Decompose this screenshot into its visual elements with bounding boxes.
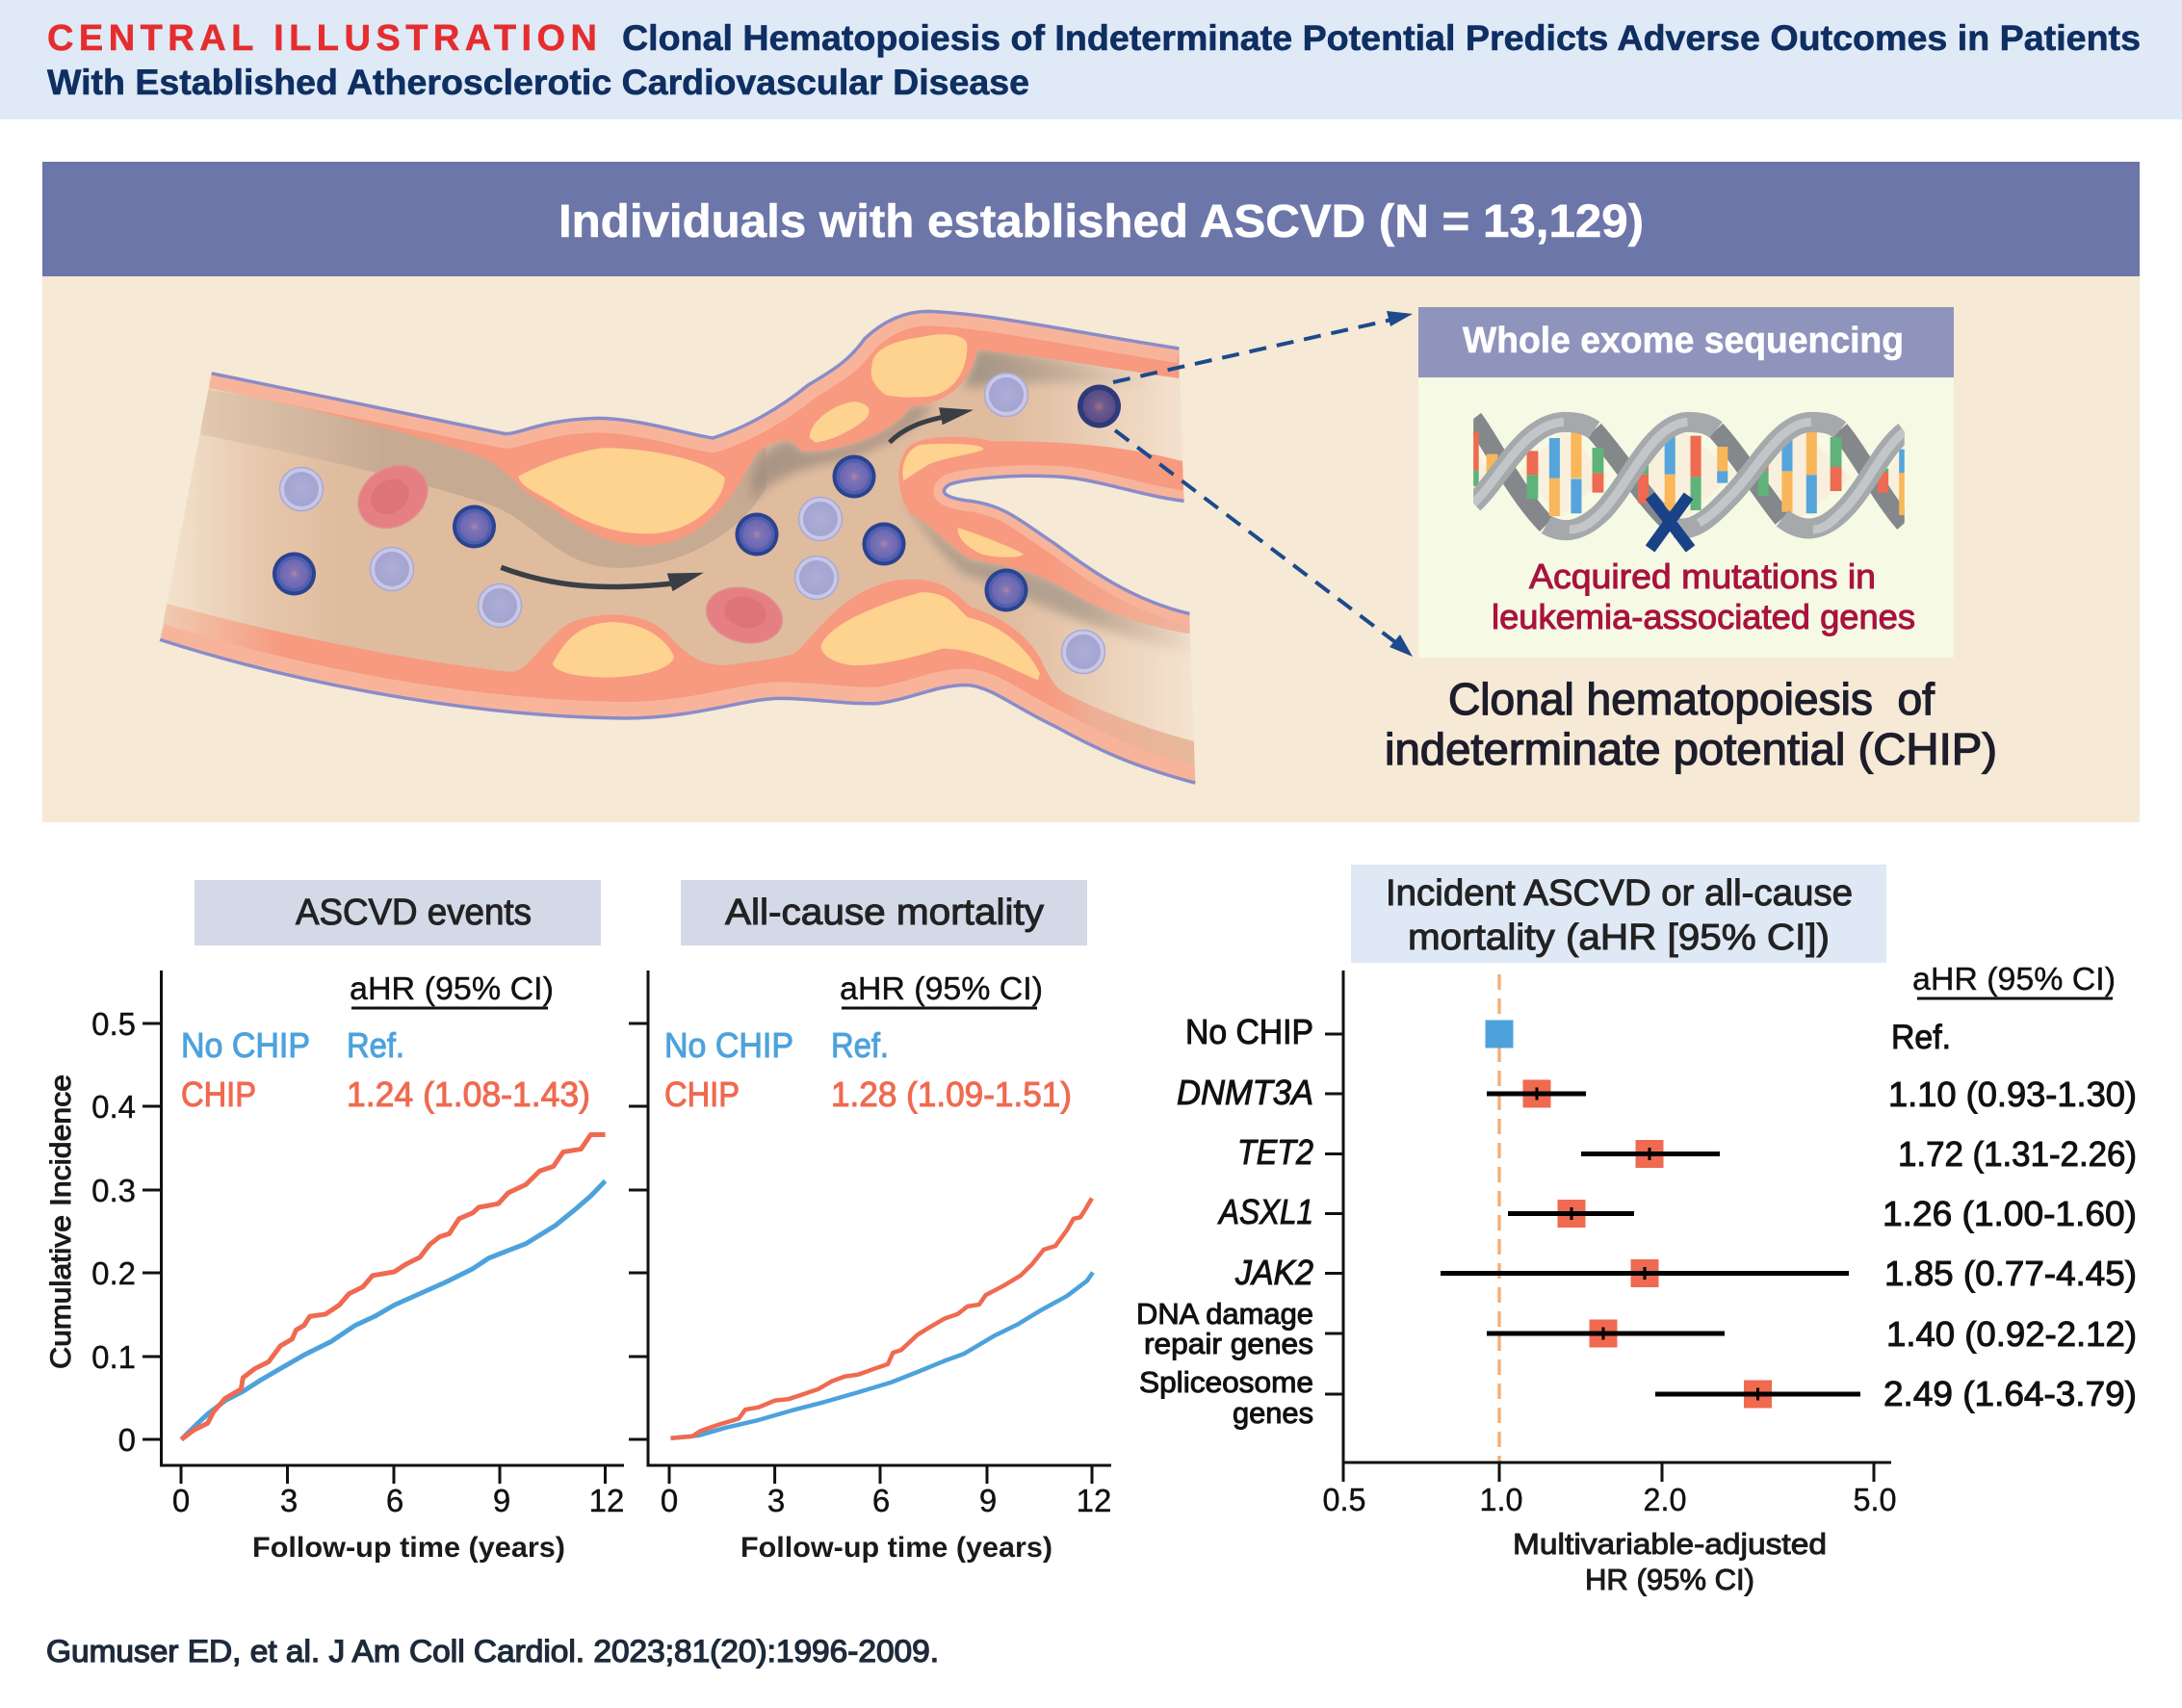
row labels: genes: [1233, 1396, 1313, 1430]
value column: Ref.: [1891, 1019, 1951, 1056]
value column: aHR (95% CI): [1912, 961, 2116, 996]
y axis labels: 0.4: [91, 1089, 136, 1125]
row labels: No CHIP: [1185, 1012, 1313, 1051]
legend: CHIP: [181, 1074, 256, 1114]
x axis labels: 12: [589, 1483, 624, 1518]
x axis labels: 6: [386, 1483, 403, 1518]
legend: No CHIP: [181, 1025, 310, 1065]
x axis labels: 9: [493, 1483, 510, 1518]
upper wall: [209, 311, 1179, 546]
row labels: [1136, 1012, 1313, 1430]
pale blood cells: [279, 374, 1105, 674]
y axis labels: 0.3: [91, 1173, 136, 1208]
arrow: to exome sequencing box bottom: [1115, 430, 1413, 657]
legend: [181, 970, 590, 1114]
y axis labels: 0.1: [91, 1339, 136, 1375]
x axis title: Follow-up time (years): [740, 1532, 1052, 1564]
chart heading: All-cause mortality: [725, 893, 1044, 933]
row labels: DNA damage: [1136, 1297, 1313, 1331]
axes: [629, 970, 1111, 1484]
header band: [0, 0, 2182, 119]
row labels: DNMT3A: [1177, 1073, 1313, 1112]
chart heading: [195, 880, 601, 945]
legend: No CHIP: [664, 1025, 793, 1065]
lower wall: [160, 580, 1195, 787]
lumen: [168, 349, 1184, 738]
axes: [1325, 970, 1891, 1482]
x axis labels: 9: [979, 1483, 997, 1518]
title: [47, 18, 2141, 102]
dark leukocytes: [273, 385, 1121, 612]
chart heading: ASCVD events: [296, 893, 532, 933]
row labels: TET2: [1237, 1132, 1313, 1172]
legend: 1.28 (1.09-1.51): [831, 1074, 1072, 1114]
arrow: to exome sequencing box top: [1113, 311, 1413, 382]
x axis labels: 0.5: [1323, 1482, 1365, 1517]
legend: 1.24 (1.08-1.43): [347, 1074, 590, 1114]
curves: [670, 1199, 1093, 1438]
y axis labels: 0.5: [91, 1006, 136, 1042]
x axis labels: [1323, 1482, 1897, 1517]
flow arrows: [501, 407, 974, 591]
value column: 1.72 (1.31-2.26): [1898, 1134, 2137, 1174]
value column: 1.85 (0.77-4.45): [1884, 1254, 2137, 1293]
legend: aHR (95% CI): [350, 970, 554, 1006]
row labels: repair genes: [1144, 1327, 1313, 1360]
CHIP caption: Clonal hematopoiesis of: [1448, 674, 1935, 724]
curves: [181, 1134, 606, 1439]
reference line: [1497, 974, 1501, 1462]
CHIP caption: indeterminate potential (CHIP): [1385, 724, 1997, 774]
title: Clonal Hematopoiesis of Indeterminate Potential Predicts Adverse Outcomes in Patients: [622, 18, 2141, 58]
x axis labels: 1.0: [1479, 1482, 1523, 1517]
legend: Ref.: [831, 1025, 889, 1065]
x axis labels: [661, 1483, 1111, 1518]
markers: [1441, 1021, 1860, 1408]
value column: 1.26 (1.00-1.60): [1883, 1194, 2137, 1233]
x axis labels: 6: [872, 1483, 890, 1518]
value column: 2.49 (1.64-3.79): [1883, 1374, 2137, 1413]
value column: [1883, 961, 2137, 1413]
branch wall: [898, 437, 1189, 634]
forest heading: Incident ASCVD or all-cause: [1386, 873, 1853, 914]
mutation caption: Acquired mutations in: [1529, 556, 1876, 596]
legend: [664, 970, 1072, 1114]
legend: CHIP: [664, 1074, 740, 1114]
y axis title: Cumulative Incidence: [45, 1074, 77, 1369]
legend: aHR (95% CI): [840, 970, 1043, 1006]
row labels: JAK2: [1234, 1253, 1313, 1292]
value column: 1.40 (0.92-2.12): [1886, 1314, 2137, 1354]
x axis labels: 2.0: [1643, 1482, 1687, 1517]
x axis title: Follow-up time (years): [252, 1532, 565, 1564]
y axis labels: 0: [118, 1422, 136, 1458]
red blood cells: [347, 453, 789, 651]
axes: [143, 970, 624, 1484]
exome heading: Whole exome sequencing: [1463, 321, 1904, 361]
x axis title: Multivariable-adjusted: [1513, 1527, 1827, 1561]
citation: Gumuser ED, et al. J Am Coll Cardiol. 2023;81(20):1996-2009.: [46, 1634, 939, 1669]
illustration: artery with plaques and blood cells: [160, 311, 1197, 787]
y axis labels: [91, 1006, 136, 1458]
value column: 1.10 (0.93-1.30): [1888, 1074, 2137, 1114]
forest heading: mortality (aHR [95% CI]): [1408, 918, 1830, 958]
outer wall bands: [160, 311, 1195, 783]
x axis labels: 5.0: [1853, 1482, 1897, 1517]
x axis title: [1513, 1527, 1827, 1596]
chart: forest plot: [1136, 865, 2137, 1596]
y axis labels: 0.2: [91, 1255, 136, 1291]
CHIP caption: [1385, 674, 1997, 774]
mutation caption: [1492, 556, 1915, 636]
row labels: ASXL1: [1217, 1192, 1313, 1231]
x axis labels: 3: [280, 1483, 298, 1518]
plaques: [519, 334, 1040, 680]
x axis title: HR (95% CI): [1585, 1563, 1754, 1596]
x axis labels: 0: [172, 1483, 190, 1518]
label: central illustration: CENTRAL ILLUSTRATION: [47, 18, 597, 59]
legend: Ref.: [347, 1025, 404, 1065]
x axis labels: 3: [767, 1483, 785, 1518]
icon: DNA double helix: [1473, 419, 1905, 549]
x axis labels: [172, 1483, 624, 1518]
panel: whole exome sequencing: [1418, 307, 1954, 658]
title: With Established Atherosclerotic Cardiovascular Disease: [47, 63, 1029, 102]
x axis labels: 0: [661, 1483, 678, 1518]
x axis labels: 12: [1077, 1483, 1111, 1518]
chart: all-cause mortality: [629, 880, 1111, 1564]
forest heading: [1351, 865, 1886, 963]
chart: ASCVD events: [45, 880, 624, 1564]
row labels: Spliceosome: [1139, 1365, 1313, 1399]
mutation caption: leukemia-associated genes: [1492, 597, 1915, 636]
vessel outline: [160, 311, 1195, 783]
icon: mutation X: [1650, 496, 1691, 549]
chart heading: [681, 880, 1087, 945]
banner heading: Individuals with established ASCVD (N = 13,129): [558, 196, 1644, 247]
panel: study population: [42, 162, 2140, 822]
